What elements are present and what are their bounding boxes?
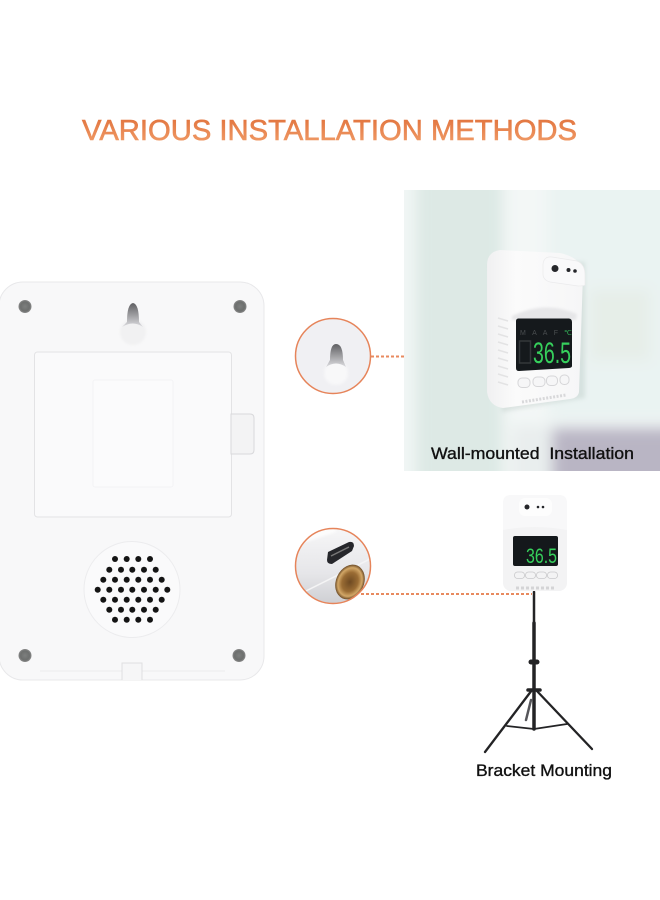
battery cover (34, 352, 232, 517)
buttons (514, 572, 558, 578)
corner screws (18, 300, 246, 662)
device back body (0, 282, 264, 680)
under-head shade (512, 307, 577, 320)
panel: bracket mounting (476, 495, 612, 780)
dim digit (520, 341, 530, 363)
sensor holes (552, 265, 577, 273)
buttons (518, 375, 569, 388)
wall device: ℃ (564, 330, 572, 337)
callout: keyhole detail (296, 318, 370, 394)
display (516, 318, 572, 371)
title: VARIOUS INSTALLATION METHODS (82, 115, 577, 147)
device body (487, 250, 583, 408)
sensor head (543, 257, 585, 286)
wall device (487, 250, 585, 412)
caption: wall-mounted: Wall-mounted Installation (431, 445, 634, 463)
tripod (485, 592, 592, 752)
side ribs (498, 318, 508, 385)
brass insert (335, 564, 365, 600)
speaker grille (84, 542, 180, 638)
sensor pill (519, 498, 552, 516)
bottom edge seam (40, 670, 225, 672)
device shadow (502, 262, 586, 412)
battery latch (231, 414, 254, 454)
vent (522, 395, 566, 402)
usb port (327, 542, 354, 564)
blurred wall background (415, 190, 660, 471)
display labels: M A A F (520, 330, 558, 337)
keyhole mount (120, 303, 146, 345)
inner label area (93, 380, 173, 487)
display (513, 536, 558, 566)
temperature reading: 36.5 (526, 545, 557, 568)
panel: device back view (0, 282, 264, 680)
callout: port detail (296, 528, 372, 604)
dotted connector: keyhole to wall photo (371, 356, 404, 358)
caption: bracket: Bracket Mounting (476, 762, 612, 780)
vent (516, 586, 554, 590)
bottom clip (122, 663, 142, 680)
stand device (503, 495, 567, 591)
panel: wall-mounted photo (404, 190, 660, 471)
temperature reading: 36.5 (533, 337, 571, 370)
body shade (503, 495, 567, 530)
dotted connector: port to bracket (361, 593, 532, 595)
